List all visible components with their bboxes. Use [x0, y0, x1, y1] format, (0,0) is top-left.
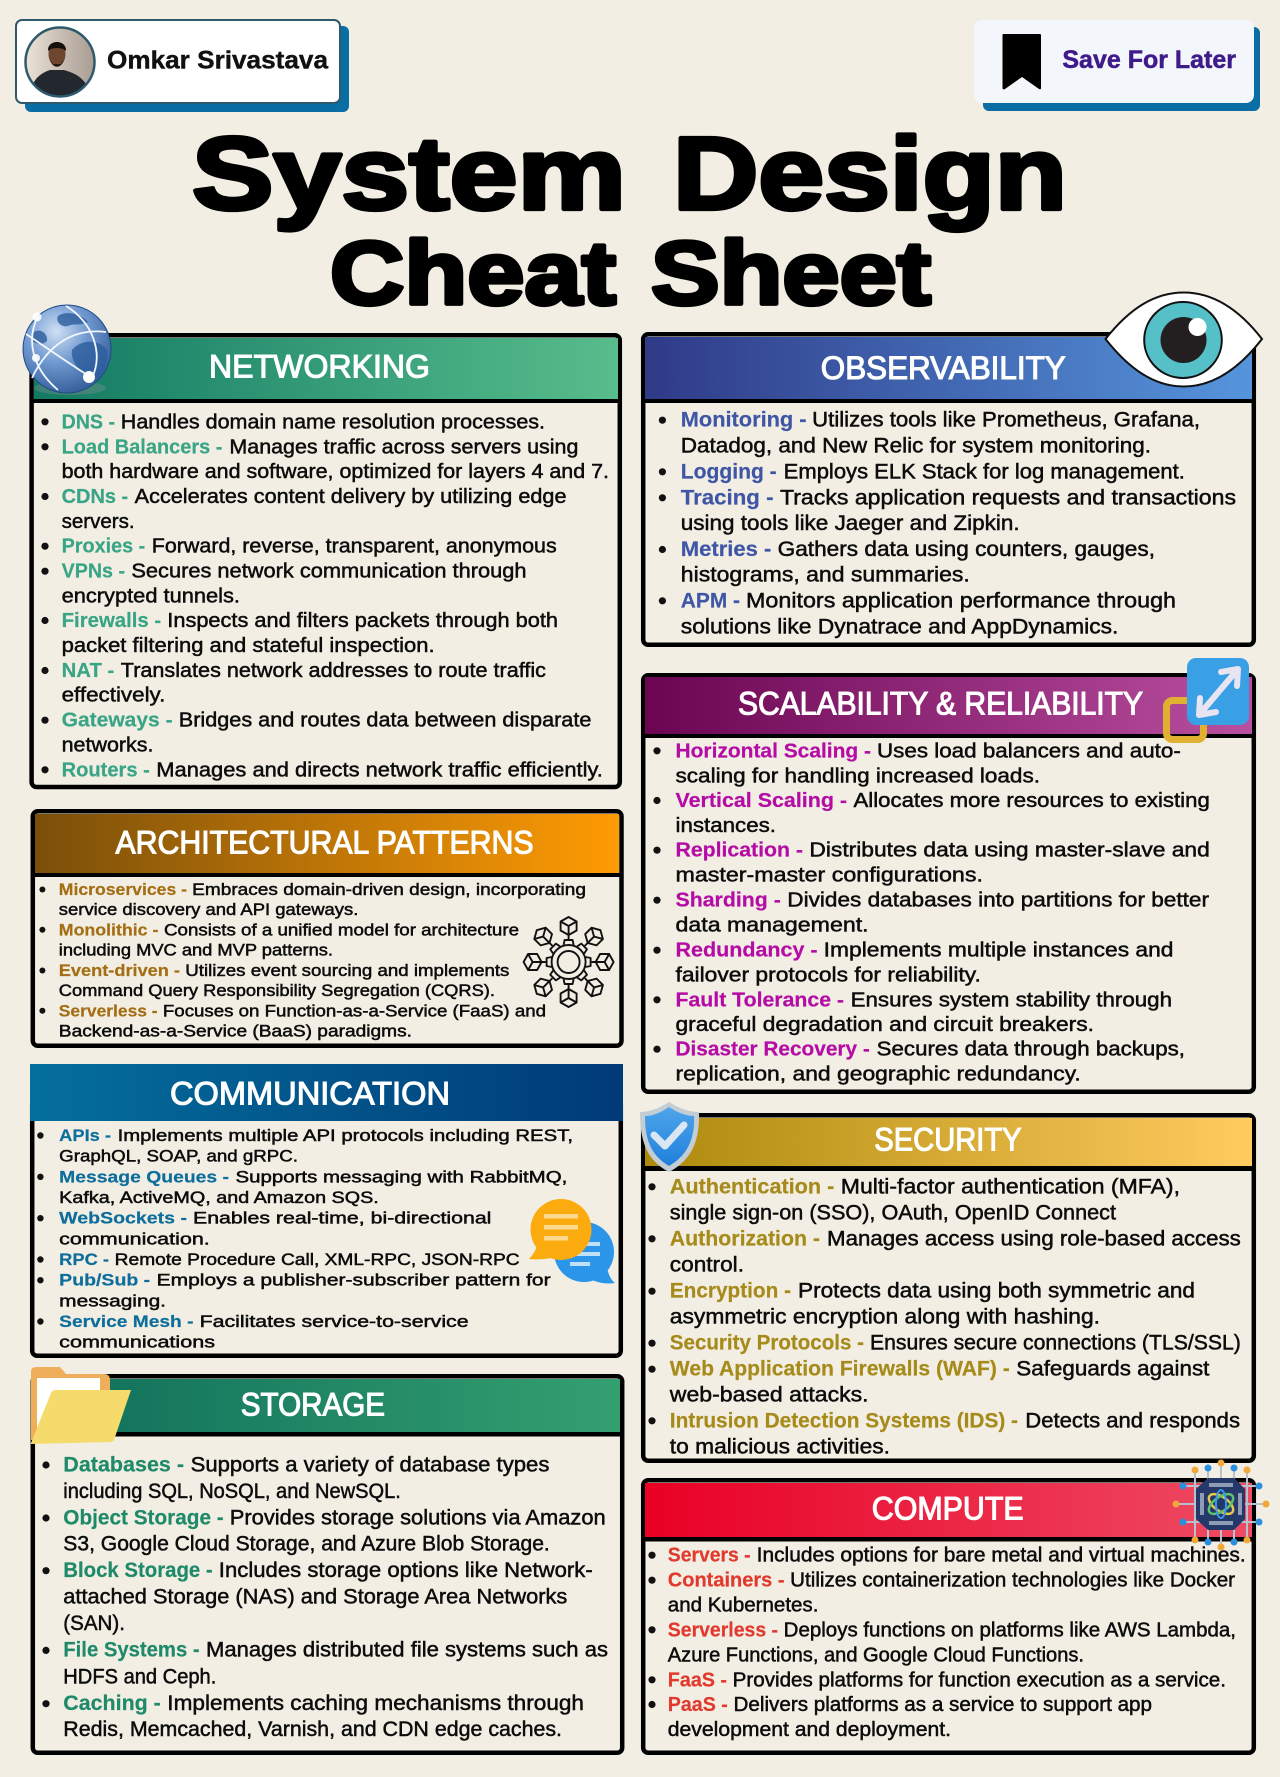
- security header bar: [645, 1118, 1252, 1166]
- item: caching: Implements caching mechanisms through: [167, 1691, 584, 1715]
- save for later text: Save For Later: [1062, 46, 1236, 74]
- item: APM: APM -: [681, 589, 740, 612]
- icon: globe: [23, 305, 111, 395]
- item: serverless: [39, 1001, 546, 1040]
- item: replication: Distributes data using master-slave and: [809, 840, 1210, 862]
- item: web application firewalls: Safeguards against: [1016, 1358, 1210, 1381]
- item: authorization: Authorization -: [670, 1227, 820, 1250]
- item: object storage: Object Storage -: [63, 1505, 224, 1529]
- item: monitoring: Datadog, and New Relic for system monitoring.: [681, 434, 1151, 457]
- item: authorization: [648, 1227, 1241, 1277]
- item: APM: Monitors application performance through: [746, 589, 1176, 612]
- scalability heading: SCALABILITY & RELIABILITY: [738, 685, 1143, 721]
- scalability header bar: [645, 677, 1252, 734]
- title: System: [192, 116, 626, 231]
- item: containers: and Kubernetes.: [668, 1595, 818, 1617]
- item: block storage: Block Storage -: [63, 1558, 213, 1582]
- item: APM: [659, 589, 1176, 638]
- item: event-driven: Command Query Responsibility Segregation (CQRS).: [59, 981, 495, 1000]
- item: load balancers: Manages traffic across servers using: [229, 435, 578, 458]
- item: gateways: [41, 709, 591, 756]
- panel: networking: [30, 335, 622, 787]
- item: monitoring: Utilizes tools like Prometheus, Grafana,: [812, 409, 1200, 432]
- item: fault tolerance: graceful degradation and circuit breakers.: [676, 1014, 1094, 1036]
- item: vertical scaling: Allocates more resources to existing: [854, 790, 1210, 812]
- storage heading: STORAGE: [241, 1387, 385, 1423]
- item: websockets: communication.: [59, 1229, 210, 1248]
- item: file systems: File Systems -: [63, 1638, 200, 1662]
- item: servers: Includes options for bare metal and virtual machines.: [757, 1545, 1246, 1567]
- icon: network gear: [524, 917, 614, 1007]
- item: block storage: Includes storage options like Network-: [219, 1558, 593, 1582]
- item: authorization: control.: [670, 1254, 744, 1277]
- item: monolithic: including MVC and MVP patterns.: [59, 941, 333, 960]
- item: DNS: DNS -: [62, 410, 115, 433]
- item: file systems: [42, 1638, 608, 1688]
- item: containers: Utilizes containerization technologies like Docker: [790, 1570, 1235, 1592]
- panel: communication: [30, 1064, 623, 1356]
- item: vertical scaling: Vertical Scaling -: [676, 790, 847, 812]
- item: tracing: [659, 486, 1236, 535]
- item: pub/sub: Pub/Sub -: [59, 1271, 150, 1290]
- communication header bar: [30, 1064, 623, 1121]
- item: security protocols: Ensures secure connections (TLS/SSL): [870, 1332, 1241, 1355]
- icon: scaling arrows: [1166, 658, 1249, 740]
- save for later badge: [974, 20, 1260, 111]
- item: service mesh: Service Mesh -: [59, 1312, 194, 1331]
- icon: processor chip: [1172, 1460, 1270, 1550]
- compute header bar: [645, 1483, 1252, 1537]
- item: web application firewalls: Web Application Firewalls (WAF) -: [670, 1358, 1010, 1381]
- item: PaaS: Delivers platforms as a service to support app: [734, 1694, 1152, 1716]
- item: monolithic: Consists of a unified model for architecture: [164, 920, 519, 939]
- item: gateways: networks.: [62, 733, 154, 756]
- item: encryption: asymmetric encryption along with hashing.: [670, 1306, 1100, 1329]
- item: CDNs: Accelerates content delivery by utilizing edge: [135, 485, 566, 508]
- item: horizontal scaling: scaling for handling increased loads.: [676, 765, 1040, 787]
- item: APIs: [37, 1126, 573, 1166]
- security heading: SECURITY: [874, 1122, 1022, 1158]
- author avatar: [26, 28, 94, 96]
- item: security protocols: [648, 1332, 1241, 1355]
- item: replication: Replication -: [676, 840, 803, 862]
- item: load balancers: [41, 435, 609, 483]
- item: intrusion detection systems: to malicious activities.: [670, 1435, 890, 1458]
- item: block storage: attached Storage (NAS) and Storage Area Networks: [63, 1585, 567, 1609]
- item: databases: Supports a variety of database types: [191, 1452, 549, 1476]
- item: databases: Databases -: [63, 1452, 184, 1476]
- item: websockets: WebSockets -: [59, 1209, 187, 1228]
- item: NAT: [41, 659, 546, 707]
- item: firewalls: Inspects and filters packets through both: [167, 609, 558, 632]
- panel: architectural patterns: [31, 811, 623, 1046]
- item: websockets: Enables real-time, bi-directional: [193, 1209, 491, 1228]
- item: serverless: [648, 1619, 1236, 1666]
- item: redundancy: failover protocols for reliability.: [676, 965, 981, 987]
- item: tracing: Tracks application requests and transactions: [780, 486, 1236, 509]
- item: pub/sub: messaging.: [59, 1291, 166, 1310]
- item: authentication: [648, 1175, 1180, 1224]
- item: containers: Containers -: [668, 1570, 784, 1592]
- item: monolithic: Monolithic -: [59, 920, 158, 939]
- panel: storage: [31, 1376, 624, 1753]
- item: CDNs: CDNs -: [62, 485, 128, 508]
- item: microservices: [39, 880, 586, 919]
- item: redundancy: Implements multiple instances and: [824, 940, 1174, 962]
- item: monolithic: [39, 920, 519, 960]
- item: metrics: Gathers data using counters, gauges,: [778, 538, 1155, 561]
- item: firewalls: packet filtering and stateful inspection.: [62, 634, 435, 657]
- item: disaster recovery: Secures data through backups,: [877, 1039, 1185, 1061]
- item: replication: master-master configurations.: [676, 865, 983, 887]
- item: security protocols: Security Protocols -: [670, 1332, 864, 1355]
- item: web application firewalls: [648, 1358, 1210, 1407]
- item: load balancers: Load Balancers -: [62, 435, 222, 458]
- item: metrics: [659, 538, 1155, 587]
- item: FaaS: FaaS -: [668, 1669, 727, 1691]
- item: authentication: single sign-on (SSO), OAuth, OpenID Connect: [670, 1201, 1116, 1224]
- title: Sheet: [651, 224, 931, 324]
- item: NAT: Translates network addresses to route traffic: [121, 659, 546, 682]
- item: RPC: Remote Procedure Call, XML-RPC, JSON-RPC: [115, 1250, 520, 1269]
- item: fault tolerance: Fault Tolerance -: [676, 989, 844, 1011]
- item: encryption: [648, 1280, 1195, 1329]
- panel: scalability and reliability: [641, 675, 1256, 1092]
- item: logging: Logging -: [681, 460, 777, 483]
- item: monitoring: Monitoring -: [681, 409, 807, 432]
- item: message queues: Supports messaging with RabbitMQ,: [236, 1167, 567, 1186]
- item: APM: solutions like Dynatrace and AppDynamics.: [681, 615, 1118, 638]
- item: pub/sub: [37, 1271, 551, 1310]
- item: block storage: [42, 1558, 593, 1635]
- item: intrusion detection systems: [648, 1409, 1240, 1458]
- item: routers: Manages and directs network traffic efficiently.: [156, 758, 603, 781]
- item: tracing: Tracing -: [681, 486, 774, 509]
- item: encryption: Encryption -: [670, 1280, 791, 1303]
- item: fault tolerance: Ensures system stability through: [851, 989, 1172, 1011]
- communication heading: COMMUNICATION: [170, 1075, 450, 1111]
- item: object storage: S3, Google Cloud Storage, and Azure Blob Storage.: [63, 1532, 550, 1556]
- item: proxies: Proxies -: [62, 535, 145, 558]
- title: Design: [673, 116, 1067, 231]
- item: serverless: Deploys functions on platforms like AWS Lambda,: [784, 1619, 1236, 1641]
- item: firewalls: [41, 609, 558, 657]
- item: redundancy: [653, 940, 1174, 987]
- item: databases: including SQL, NoSQL, and NewSQL.: [63, 1479, 401, 1503]
- item: authorization: Manages access using role-based access: [827, 1227, 1241, 1250]
- item: sharding: Sharding -: [676, 890, 781, 912]
- networking header bar: [34, 338, 618, 399]
- item: file systems: HDFS and Ceph.: [63, 1664, 216, 1688]
- item: horizontal scaling: Uses load balancers and auto-: [877, 740, 1181, 762]
- item: object storage: [42, 1505, 606, 1556]
- item: sharding: Divides databases into partitions for better: [787, 890, 1209, 912]
- item: metrics: histograms, and summaries.: [681, 564, 970, 587]
- item: serverless: Backend-as-a-Service (BaaS) paradigms.: [59, 1021, 412, 1040]
- item: monitoring: [659, 409, 1200, 457]
- author name: Omkar Srivastava: [107, 46, 329, 74]
- networking heading: NETWORKING: [209, 349, 430, 385]
- item: object storage: Provides storage solutions via Amazon: [230, 1505, 606, 1529]
- item: APIs: GraphQL, SOAP, and gRPC.: [59, 1147, 298, 1166]
- item: block storage: (SAN).: [63, 1611, 125, 1635]
- item: gateways: Bridges and routes data between disparate: [179, 709, 591, 732]
- storage header bar: [35, 1379, 620, 1432]
- item: file systems: Manages distributed file systems such as: [206, 1638, 608, 1662]
- item: fault tolerance: [653, 989, 1172, 1036]
- item: logging: Employs ELK Stack for log management.: [784, 460, 1185, 483]
- item: VPNs: encrypted tunnels.: [62, 584, 240, 607]
- item: disaster recovery: [653, 1039, 1185, 1086]
- item: redundancy: Redundancy -: [676, 940, 818, 962]
- item: intrusion detection systems: Detects and responds: [1025, 1409, 1240, 1432]
- item: NAT: effectively.: [62, 684, 165, 707]
- item: DNS: Handles domain name resolution processes.: [121, 410, 545, 433]
- item: containers: [648, 1570, 1235, 1617]
- item: disaster recovery: Disaster Recovery -: [676, 1039, 870, 1061]
- item: sharding: data management.: [676, 915, 869, 937]
- item: caching: Caching -: [63, 1691, 161, 1715]
- item: intrusion detection systems: Intrusion Detection Systems (IDS) -: [670, 1409, 1018, 1432]
- item: NAT: NAT -: [62, 659, 114, 682]
- item: gateways: Gateways -: [62, 709, 173, 732]
- item: firewalls: Firewalls -: [62, 609, 161, 632]
- icon: chat bubbles: [529, 1199, 615, 1284]
- item: APIs: Implements multiple API protocols including REST,: [118, 1126, 573, 1145]
- item: RPC: RPC -: [59, 1250, 109, 1269]
- author badge: [16, 20, 349, 112]
- item: serverless: Focuses on Function-as-a-Service (FaaS) and: [163, 1001, 546, 1020]
- item: VPNs: [41, 560, 527, 607]
- item: serverless: Serverless -: [59, 1001, 158, 1020]
- icon: bookmark: [1002, 34, 1041, 89]
- icon: shield: [640, 1102, 699, 1172]
- item: microservices: Embraces domain-driven design, incorporating: [192, 880, 586, 899]
- item: microservices: Microservices -: [59, 880, 187, 899]
- item: message queues: Kafka, ActiveMQ, and Amazon SQS.: [59, 1188, 379, 1207]
- icon: eye: [1106, 292, 1262, 386]
- item: message queues: [37, 1167, 567, 1207]
- item: PaaS: PaaS -: [668, 1694, 728, 1716]
- item: PaaS: development and deployment.: [668, 1719, 951, 1741]
- item: metrics: Metries -: [681, 538, 771, 561]
- item: proxies: Forward, reverse, transparent, anonymous: [152, 535, 557, 558]
- item: microservices: service discovery and API gateways.: [59, 900, 358, 919]
- item: routers: Routers -: [62, 758, 150, 781]
- item: replication: [653, 840, 1210, 887]
- item: load balancers: both hardware and software, optimized for layers 4 and 7.: [62, 460, 609, 483]
- item: disaster recovery: replication, and geographic redundancy.: [676, 1064, 1081, 1086]
- item: PaaS: [648, 1694, 1152, 1741]
- item: VPNs: Secures network communication through: [131, 560, 526, 583]
- item: caching: Redis, Memcached, Varnish, and CDN edge caches.: [63, 1717, 562, 1741]
- panel: compute: [641, 1480, 1256, 1753]
- panel: security: [641, 1115, 1256, 1461]
- item: FaaS: Provides platforms for function execution as a service.: [733, 1669, 1226, 1691]
- item: vertical scaling: instances.: [676, 815, 776, 837]
- item: event-driven: Event-driven -: [59, 961, 180, 980]
- item: pub/sub: Employs a publisher-subscriber pattern for: [157, 1271, 551, 1290]
- item: serverless: Serverless -: [668, 1619, 778, 1641]
- item: web application firewalls: web-based attacks.: [669, 1384, 869, 1407]
- title: [192, 116, 1067, 324]
- item: message queues: Message Queues -: [59, 1167, 229, 1186]
- item: CDNs: servers.: [62, 510, 135, 533]
- panel: observability: [641, 334, 1256, 645]
- item: event-driven: [39, 961, 509, 1000]
- observability header bar: [645, 337, 1252, 399]
- item: databases: [42, 1452, 549, 1503]
- item: sharding: [653, 890, 1209, 937]
- compute heading: COMPUTE: [872, 1490, 1024, 1526]
- item: VPNs: VPNs -: [62, 560, 125, 583]
- architectural patterns header bar: [35, 814, 619, 873]
- icon: folder: [31, 1367, 131, 1444]
- item: horizontal scaling: Horizontal Scaling -: [676, 740, 871, 762]
- item: service mesh: communications: [59, 1333, 215, 1352]
- item: service mesh: Facilitates service-to-service: [200, 1312, 469, 1331]
- item: caching: [42, 1691, 584, 1741]
- item: serverless: Azure Functions, and Google Cloud Functions.: [668, 1644, 1084, 1666]
- title: Cheat: [330, 224, 616, 324]
- observability heading: OBSERVABILITY: [821, 350, 1066, 386]
- item: event-driven: Utilizes event sourcing and implements: [185, 961, 509, 980]
- item: APIs: APIs -: [59, 1126, 111, 1145]
- item: horizontal scaling: [653, 740, 1181, 787]
- item: websockets: [37, 1209, 491, 1248]
- item: encryption: Protects data using both symmetric and: [798, 1280, 1195, 1303]
- item: vertical scaling: [653, 790, 1210, 837]
- item: tracing: using tools like Jaeger and Zipkin.: [681, 512, 1020, 535]
- item: servers: Servers -: [668, 1545, 751, 1567]
- item: authentication: Multi-factor authentication (MFA),: [841, 1175, 1180, 1198]
- architectural patterns heading: ARCHITECTURAL PATTERNS: [116, 824, 534, 860]
- item: authentication: Authentication -: [670, 1175, 834, 1198]
- item: CDNs: [41, 485, 566, 533]
- item: service mesh: [37, 1312, 469, 1352]
